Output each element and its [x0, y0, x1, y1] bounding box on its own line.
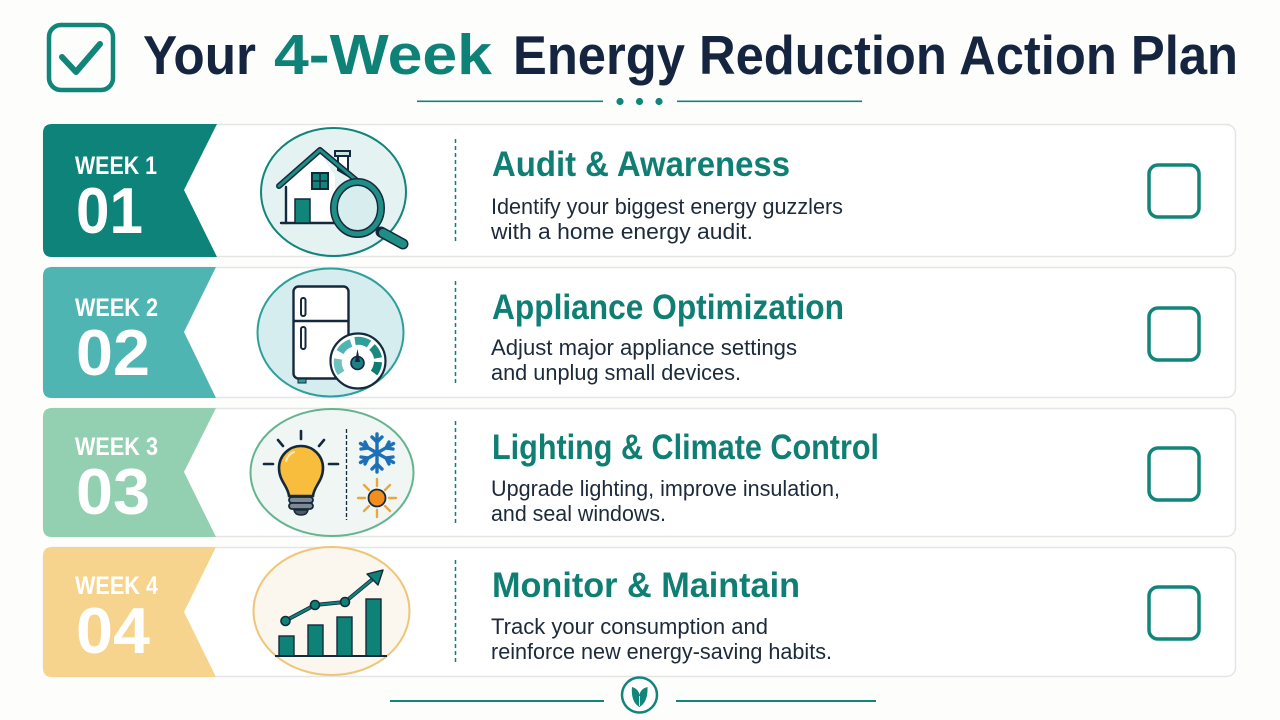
- title divider: [417, 98, 862, 105]
- icon: title checkbox: [49, 25, 113, 90]
- footer divider with leaf icon: [390, 678, 876, 712]
- panel: week 3: [43, 408, 1236, 537]
- week 2 checkbox: [1149, 308, 1199, 360]
- week 4 ribbon: WEEK 4: [75, 572, 158, 600]
- title: Your: [143, 24, 256, 86]
- week 2 ribbon: 02: [76, 316, 150, 389]
- week 2 description: Adjust major appliance settings: [491, 335, 797, 360]
- week 1 description: Identify your biggest energy guzzlers: [491, 194, 843, 219]
- week 3 ribbon: WEEK 3: [75, 433, 158, 461]
- week 2 ribbon: WEEK 2: [75, 294, 158, 322]
- icon: rising bar chart with arrow: [254, 547, 410, 675]
- week 3 ribbon: 03: [76, 455, 150, 528]
- week 3 description: Upgrade lighting, improve insulation,: [491, 476, 840, 501]
- week 3 checkbox: [1149, 448, 1199, 500]
- week 2 description: and unplug small devices.: [491, 360, 741, 385]
- panel: week 1: [43, 124, 1236, 257]
- week 4 ribbon: 04: [76, 594, 150, 667]
- week 4 ribbon: [43, 547, 216, 677]
- week 3 description: [491, 476, 840, 526]
- icon: leaf: [622, 678, 657, 712]
- icon: light bulb, snowflake and sun: [250, 409, 414, 536]
- week 2 ribbon: [43, 267, 216, 398]
- icon: house with magnifying glass: [261, 128, 406, 256]
- week 1 checkbox: [1149, 165, 1199, 217]
- week 1 ribbon: WEEK 1: [75, 152, 157, 180]
- week 4 heading: Monitor & Maintain: [492, 566, 800, 605]
- week 4 description: reinforce new energy-saving habits.: [491, 639, 832, 664]
- week 4 checkbox: [1149, 587, 1199, 639]
- title: Energy Reduction Action Plan: [513, 24, 1238, 86]
- title: 4-Week: [274, 23, 492, 87]
- icon: refrigerator with gauge: [258, 268, 404, 396]
- panel: week 4: [43, 547, 1236, 677]
- week 2 description: [491, 335, 797, 385]
- panel: week 2: [43, 267, 1236, 398]
- week 1 ribbon: [43, 124, 217, 257]
- week 1 description: [490, 194, 843, 244]
- week 1 heading: Audit & Awareness: [492, 145, 790, 184]
- week 3 description: and seal windows.: [491, 501, 666, 526]
- week 1 ribbon: 01: [76, 174, 143, 247]
- week 3 ribbon: [43, 408, 216, 537]
- week 2 heading: Appliance Optimization: [492, 288, 844, 327]
- header: [49, 23, 1238, 105]
- week 4 description: [491, 614, 832, 664]
- week 1 description: with a home energy audit.: [490, 219, 753, 244]
- week 4 description: Track your consumption and: [491, 614, 768, 639]
- title: [143, 23, 1238, 87]
- week 3 heading: Lighting & Climate Control: [492, 428, 879, 467]
